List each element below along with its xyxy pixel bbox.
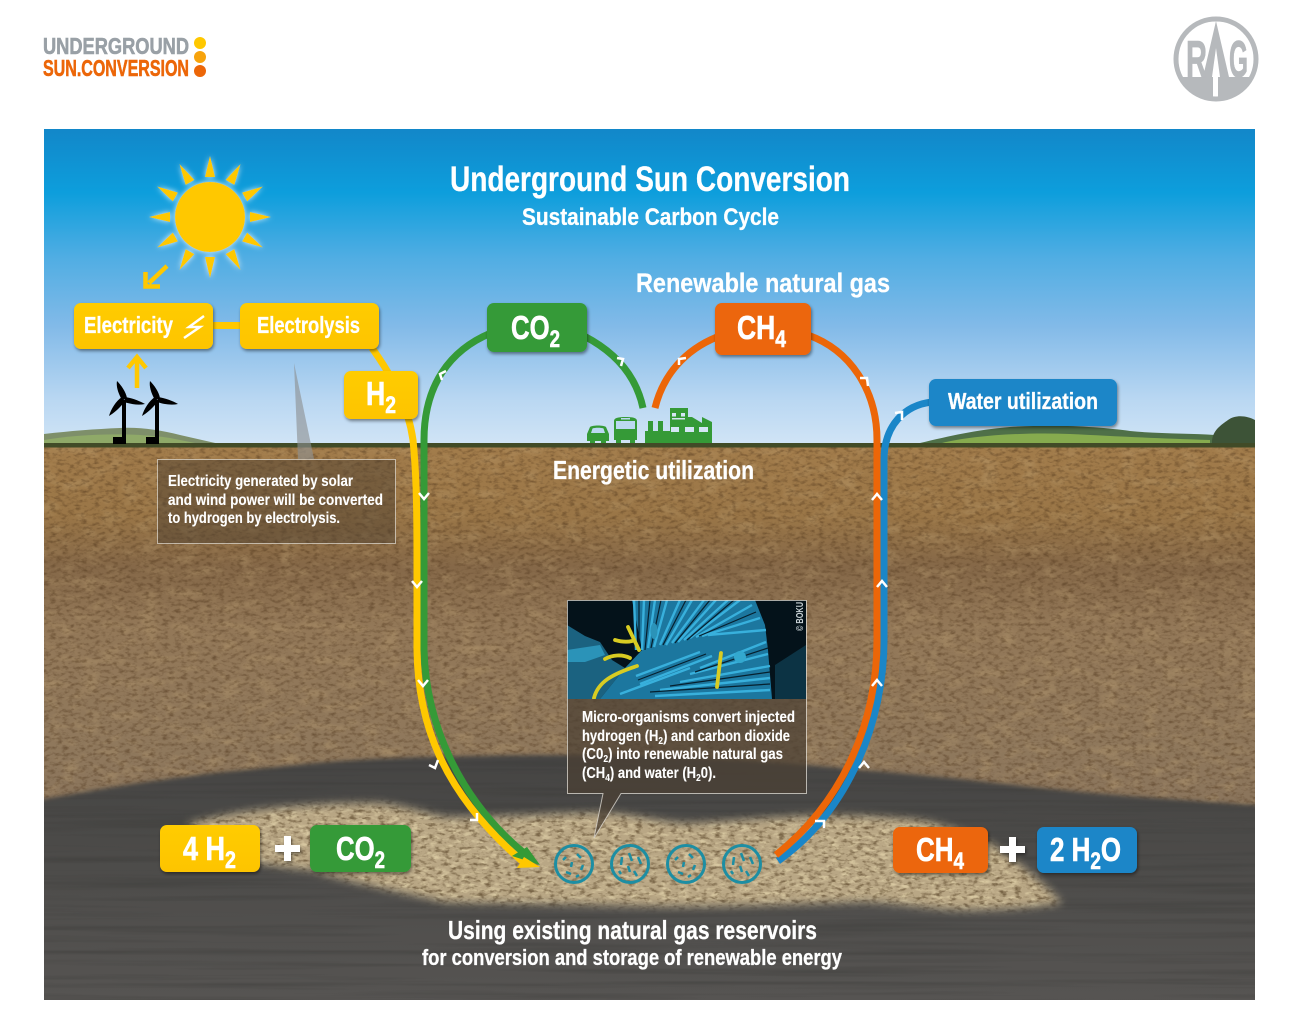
panel: micro-organisms: 0). [701, 765, 716, 782]
plus [1000, 837, 1025, 862]
logo: RAG [1172, 19, 1260, 102]
panel: scene [44, 129, 1255, 1000]
box: CH4 reservoir: 4 [953, 848, 965, 875]
micrograph: © BOKU [795, 602, 806, 631]
logo: RAG: G [1229, 31, 1248, 89]
flow: CH4 to utilization [655, 337, 717, 408]
box: 4 H2: 2 [225, 847, 236, 874]
box: H2 [344, 371, 418, 419]
panel: micro-organisms: (CH [582, 765, 610, 782]
caprock [44, 750, 1255, 1000]
box: CO2 reservoir: CO [336, 830, 386, 867]
panel: micro-organisms: Micro-organisms convert injected [582, 709, 795, 726]
flow: water up [778, 402, 932, 861]
panel: micro-organisms: ) and water (H [610, 765, 696, 782]
box: water utilization [929, 379, 1117, 426]
flow: CO2 down [424, 333, 524, 853]
box: CO2 reservoir [310, 825, 411, 874]
connector: electricity to electrolysis [212, 322, 242, 329]
panel: micro-organisms: ) into renewable natural gas [608, 746, 783, 763]
box: 2 H2O: 2 [1090, 848, 1101, 875]
icon: factory [645, 408, 712, 443]
organism 4 [724, 846, 760, 882]
panel: micro-organisms [567, 600, 806, 838]
panel: micro-organisms: hydrogen (H [582, 728, 673, 745]
label: renewable natural gas: Renewable natural gas [636, 268, 890, 298]
left hill [44, 428, 215, 443]
box: 2 H2O [1037, 827, 1137, 875]
sky [44, 129, 1255, 447]
micrograph [567, 600, 806, 699]
logo: Underground Sun.Conversion: UNDERGROUND [43, 33, 189, 59]
box: electrolysis [240, 303, 379, 349]
flow chevrons [412, 358, 902, 828]
box: CH4 [715, 303, 811, 355]
right hills [920, 416, 1255, 445]
caption: reservoirs [422, 915, 843, 970]
flow: CO2 from utilization [584, 336, 643, 408]
wind turbines [109, 381, 178, 444]
arrow: sun to electricity [146, 266, 167, 286]
panel: micro-organisms: 4 [605, 773, 610, 784]
box: CO2 reservoir: 2 [375, 847, 385, 874]
box: H2: H [366, 375, 390, 412]
caption: reservoirs: for conversion and storage of renewable energy [422, 945, 843, 970]
icon: bus [614, 417, 637, 443]
panel: micro-organisms: 2 [658, 736, 663, 747]
box: CO2: CO [511, 309, 560, 346]
caption: reservoirs: Using existing natural gas reservoirs [448, 915, 817, 945]
label: energetic utilization: Energetic utilization [553, 455, 754, 485]
callout: electricity generation: and wind power will be converted [168, 492, 383, 509]
box: 4 H2: 4 H [183, 830, 234, 867]
panel: micro-organisms: ) and carbon dioxide [663, 728, 790, 745]
box: electricity [74, 303, 213, 349]
arrow: wind to electricity [128, 357, 146, 388]
box: electrolysis: Electrolysis [257, 312, 360, 338]
box: CO2 [487, 303, 587, 353]
arrowheads at reservoir [512, 847, 540, 868]
organism 2 [612, 846, 648, 882]
callout: electricity generation: Electricity generated by solar [168, 473, 353, 490]
logo: Underground Sun.Conversion: SUN.CONVERSION [43, 55, 189, 81]
box: water utilization: Water utilization [948, 388, 1098, 414]
box: electricity: Electricity [84, 312, 173, 338]
icon: car [587, 426, 609, 443]
box: CO2: 2 [550, 326, 560, 353]
organism 1 [556, 846, 592, 882]
flow: CH4 up [776, 335, 877, 855]
box: CH4 reservoir [893, 827, 988, 875]
box: 4 H2 [160, 825, 260, 874]
callout: electricity generation [158, 363, 396, 544]
flow: hydrogen down [372, 348, 522, 861]
micro-organism circles [556, 846, 760, 882]
panel: micro-organisms: (C0 [582, 746, 607, 763]
box: CH4: 4 [775, 326, 787, 353]
sun [149, 156, 271, 278]
flow lines [372, 333, 932, 861]
box: 2 H2O: O [1101, 831, 1121, 868]
reservoir sand [185, 796, 1064, 916]
box: 2 H2O: 2 H [1050, 831, 1101, 868]
box: CH4: CH [737, 309, 785, 346]
plus [275, 836, 300, 861]
logo: RAG: R [1186, 31, 1207, 89]
organism 3 [668, 846, 704, 882]
subtitle: Sustainable Carbon Cycle [522, 204, 779, 231]
callout: electricity generation: to hydrogen by electrolysis. [168, 510, 340, 527]
box: CH4 reservoir: CH [916, 831, 964, 868]
title: Underground Sun Conversion [450, 160, 850, 199]
panel: micro-organisms: 2 [696, 773, 701, 784]
soil [44, 443, 1255, 847]
panel: micro-organisms: 2 [603, 754, 608, 765]
box: H2: 2 [385, 392, 396, 419]
logo: Underground Sun.Conversion [43, 33, 206, 81]
